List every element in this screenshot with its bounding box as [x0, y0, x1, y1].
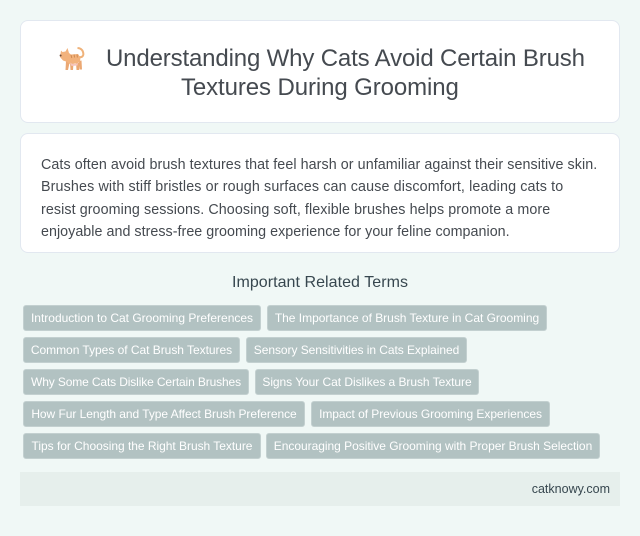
chip	[246, 337, 467, 363]
chip	[311, 401, 550, 427]
chip	[266, 433, 600, 459]
panel: title card	[20, 20, 620, 123]
chip: Encouraging Positive Grooming with Proper Brush Selection	[274, 439, 592, 453]
icon: cat	[60, 47, 84, 70]
chip: How Fur Length and Type Affect Brush Preference	[31, 407, 297, 421]
panel: footer	[20, 472, 620, 506]
panel: summary card	[20, 133, 620, 253]
text block: summary: Cats often avoid brush textures that feel harsh or unfamiliar against their sensitive skin.	[41, 157, 597, 173]
text block: summary: enjoyable and stress-free grooming experience for your feline companion.	[41, 224, 510, 240]
heading: important related terms: Important Related Terms	[232, 274, 408, 291]
text block: summary	[41, 157, 597, 240]
chip: Introduction to Cat Grooming Preferences	[31, 311, 253, 325]
heading: title: Understanding Why Cats Avoid Certain Brush	[106, 45, 585, 72]
text block: summary: resist grooming sessions. Choosing soft, flexible brushes helps promote a more	[41, 202, 550, 218]
heading: title	[106, 45, 585, 101]
chip	[23, 433, 261, 459]
panel: related term chips	[23, 305, 600, 459]
chip: Impact of Previous Grooming Experiences	[319, 407, 542, 421]
chip	[255, 369, 479, 395]
text block: summary: Brushes with stiff bristles or rough surfaces can cause discomfort, leading cats to	[41, 179, 563, 195]
chip: Why Some Cats Dislike Certain Brushes	[31, 375, 241, 389]
text: site name: catknowy.com	[532, 482, 610, 496]
chip	[23, 401, 305, 427]
heading: title: Textures During Grooming	[181, 74, 459, 101]
chip: Tips for Choosing the Right Brush Texture	[32, 439, 252, 453]
chip: Common Types of Cat Brush Textures	[31, 343, 232, 357]
chip: The Importance of Brush Texture in Cat Grooming	[275, 311, 539, 325]
chip	[23, 369, 249, 395]
chip	[267, 305, 547, 331]
chip: Sensory Sensitivities in Cats Explained	[254, 343, 459, 357]
chip	[23, 305, 261, 331]
chip	[23, 337, 240, 363]
chip: Signs Your Cat Dislikes a Brush Texture	[262, 375, 472, 389]
